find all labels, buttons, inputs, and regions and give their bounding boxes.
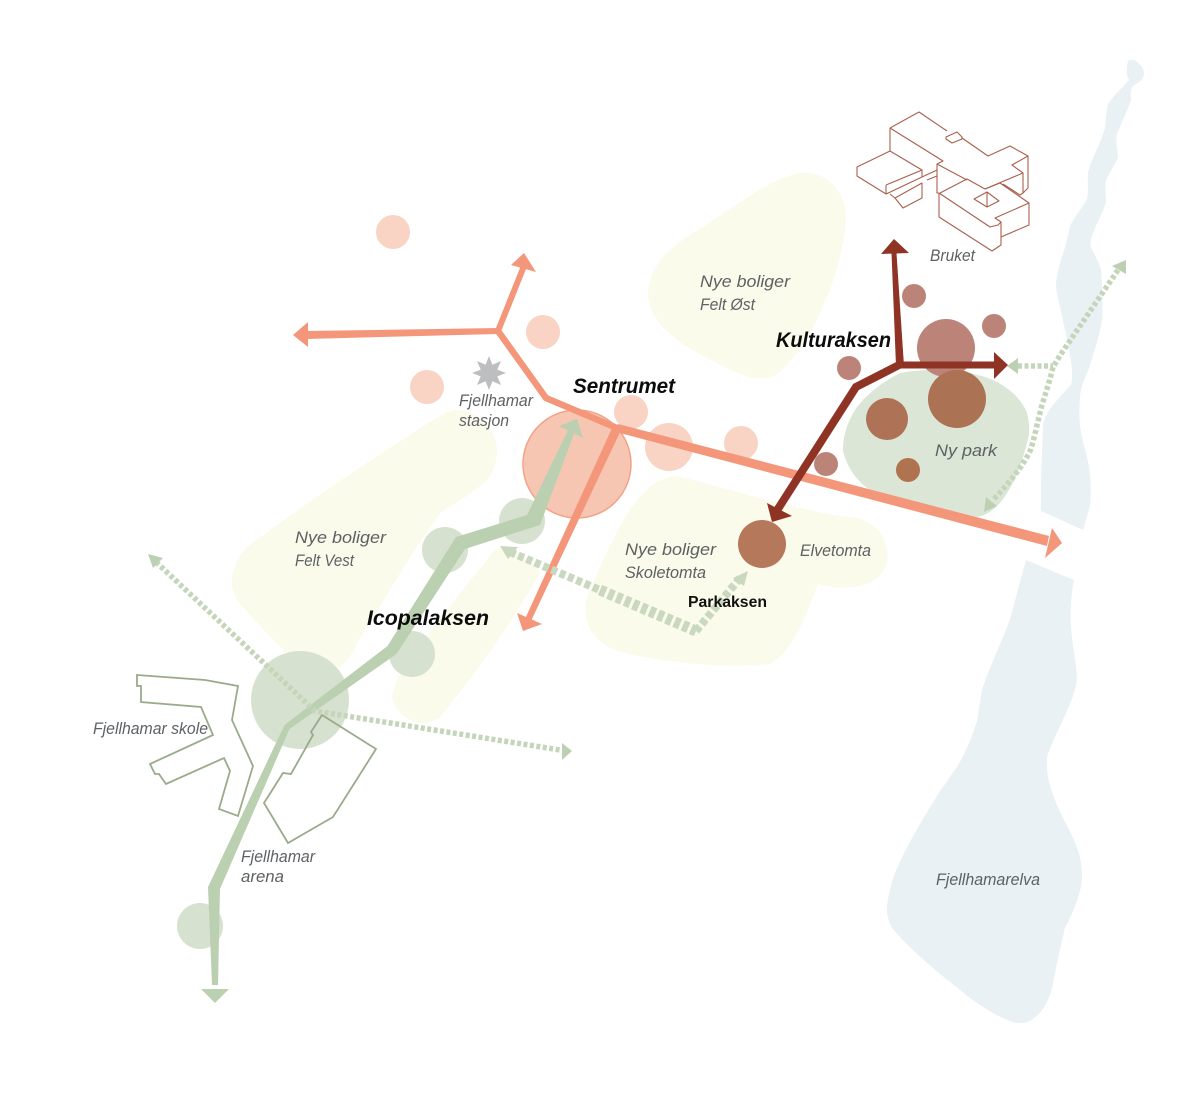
housing area: Felt Vest [232,410,497,668]
river upper [1041,60,1144,530]
node circle: Elvetomta [738,520,786,568]
label: Nye boliger Felt Vest: Nye boliger [295,528,387,547]
label: Felt Øst: Felt Øst [700,295,756,314]
arrow: Kulturaksen axis [767,239,1008,522]
park area: Ny park [843,370,1029,517]
housing area: Felt Øst [648,173,846,378]
housing area: Skoletomta [585,476,888,665]
label: Bruket: Bruket [930,246,976,265]
label: Ny park: Ny park [935,441,999,460]
label: Fjellhamar arena: Fjellhamar [241,847,316,866]
label: Fjellhamar skole: Fjellhamar skole [93,719,208,738]
river lower: Fjellhamarelva [887,560,1082,1023]
building outline: Fjellhamar arena [264,715,376,843]
label: Icopalaksen: Icopalaksen [367,607,489,630]
label: Fjellhamarelva: Fjellhamarelva [936,870,1040,889]
arrowheads: Parkaksen [500,546,748,586]
arrow: Sentrumet axis [293,253,1062,631]
label: Kulturaksen: Kulturaksen [776,329,891,352]
label: Nye boliger Felt Øst: Nye boliger [700,272,791,291]
dotted arrows: park and river links [156,270,1118,750]
star icon: station [472,356,506,390]
building outline: Fjellhamar skole [137,675,253,816]
label: stasjon: stasjon [459,411,509,430]
arrowheads: dotted links [148,260,1126,760]
main circle: Sentrumet [523,410,631,518]
label: Sentrumet: Sentrumet [573,375,676,398]
label: Felt Vest: Felt Vest [295,551,355,570]
label: Elvetomta: Elvetomta [800,541,871,560]
label: Parkaksen: Parkaksen [688,594,767,611]
label: Skoletomta: Skoletomta [625,563,706,582]
label: Fjellhamar stasjon: Fjellhamar [459,391,534,410]
arrow: Icopalaksen axis [201,419,583,1003]
label: arena: arena [241,867,284,886]
housing area: middle strip [392,547,540,723]
node circles: Icopalaksen [177,498,545,949]
label: Nye boliger Skoletomta: Nye boliger [625,540,717,559]
node circles: Kulturaksen [814,284,1006,482]
building outline: Bruket [857,112,1029,251]
node circles: Sentrumet [376,215,758,471]
dotted arrows: Parkaksen [510,552,740,631]
